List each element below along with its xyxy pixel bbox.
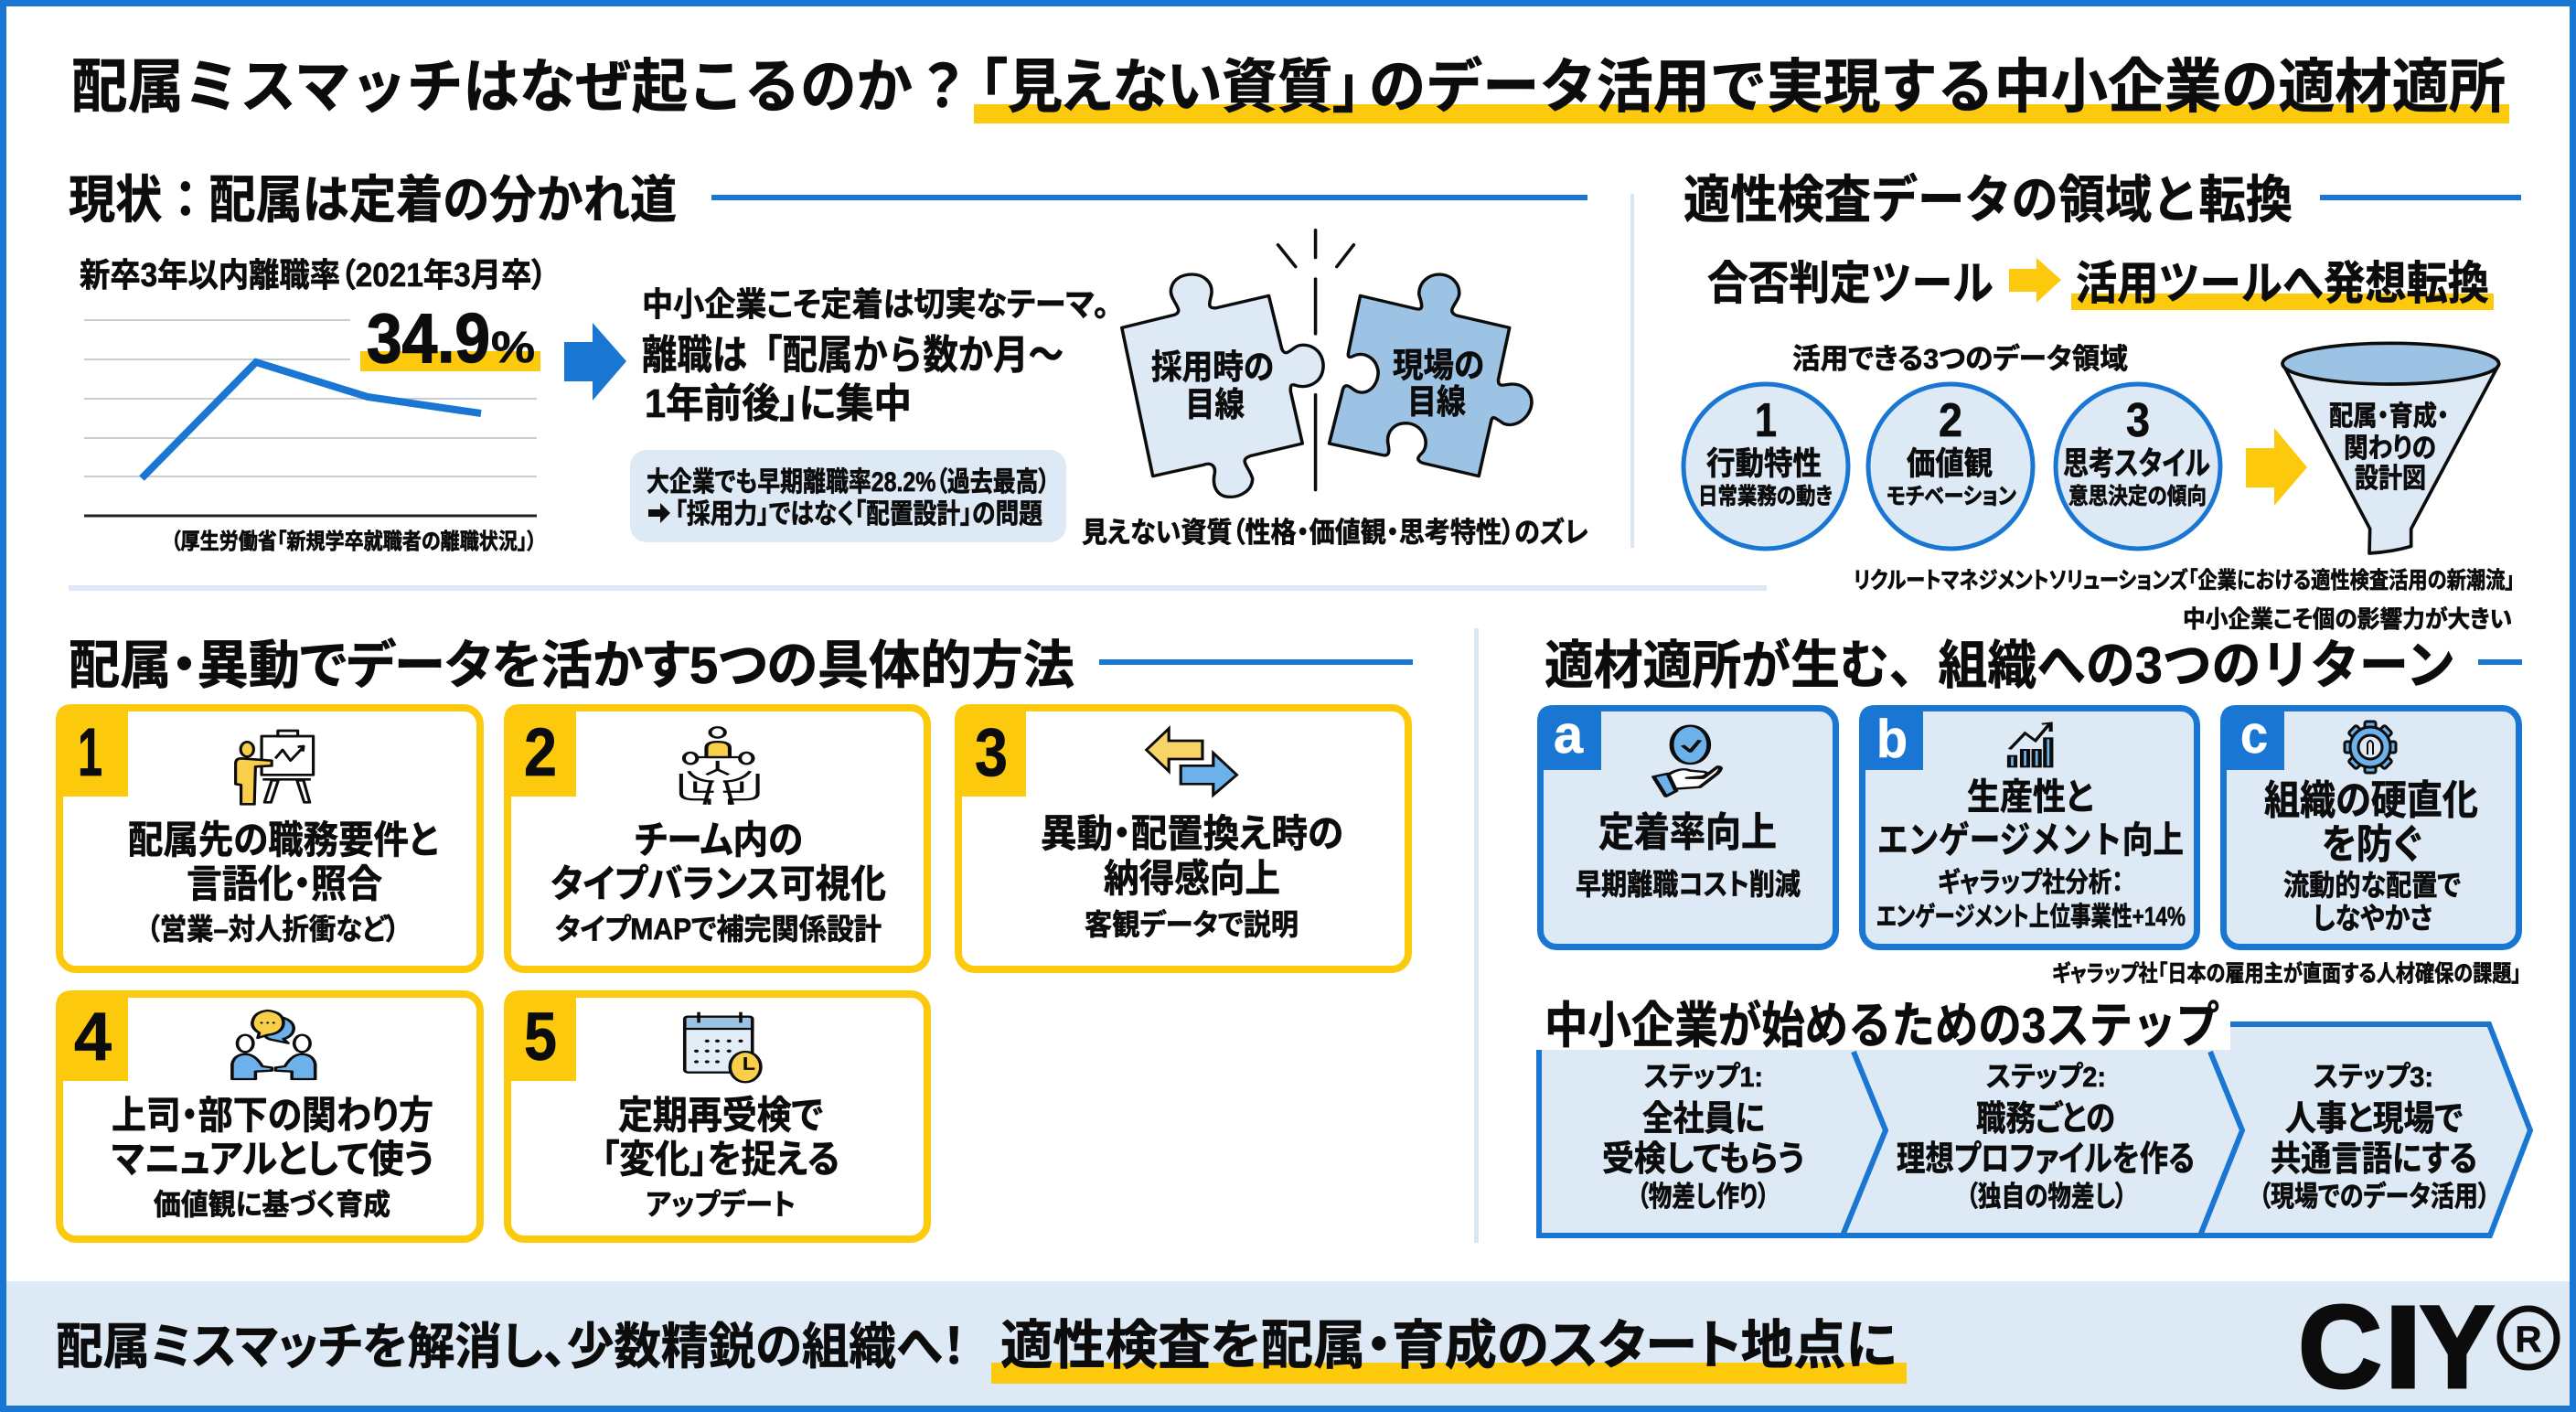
panel: three returns [1537,636,2522,987]
title [71,54,2509,123]
circle 2: 価値観 [1907,446,1993,482]
line chart [84,320,537,516]
chart title: 新卒3年以内離職率（2021年3月卒） [80,256,547,294]
heading: five methods: 配属・異動でデータを活かす5つの具体的方法 [69,636,1074,695]
step 2: 理想プロファイルを作る [1897,1140,2195,1179]
key message [642,285,1109,426]
card 4: マニュアルとして使う [112,1138,433,1181]
panel: three steps [1535,995,2530,1236]
note box [630,450,1066,542]
icon: hand with check [1653,726,1721,797]
card a: 早期離職コスト削減 [1576,868,1801,901]
chevron flow [1535,995,2530,1236]
card b [1859,705,2197,947]
card 4: 上司・部下の関わり方 [112,1094,433,1137]
card 1: 1 [78,714,102,790]
title: 配属ミスマッチはなぜ起こるのか [71,54,913,120]
card 3: 異動・配置換え時の [1041,812,1343,855]
circle 3: 思考スタイル [2063,446,2210,482]
card 3: 3 [975,714,1008,790]
card 2: タイプバランス可視化 [550,862,886,905]
puzzle caption: 見えない資質（性格・価値観・思考特性）のズレ [1082,517,1588,549]
circle 1: 行動特性 [1706,446,1822,482]
card 5: アップデート [646,1188,796,1221]
key message: 1年前後」に集中 [645,381,912,426]
card 2: 2 [524,714,557,790]
mindset shift: 活用ツールへ発想転換 [2076,258,2489,309]
card 1: 言語化・照合 [187,862,382,905]
logo: CIY: C [2298,1282,2382,1412]
logo: CIY: R [2516,1320,2542,1360]
card b: エンゲージメント上位事業性+14% [1876,902,2186,932]
circle 2: 2 [1939,394,1962,447]
illustration: puzzle pieces: 目線 [1407,383,1466,421]
step 1: （物差し作り） [1637,1181,1769,1213]
card 4: 4 [74,999,112,1075]
note box: 大企業でも早期離職率28.2%（過去最高） [647,467,1050,497]
step 2: ステップ2: [1986,1061,2106,1093]
card 4: 価値観に基づく育成 [154,1188,390,1221]
heading: three returns: 適材適所が生む、組織への3つのリターン [1545,636,2455,695]
note box: 「採用力」ではなく「配置設計」の問題 [675,499,1042,530]
icon: growth chart [2009,723,2051,766]
step 3: （現場でのデータ活用） [2259,1181,2490,1213]
icon: calendar and clock [685,1012,761,1082]
card b: b [1876,710,1908,769]
logo: CIY: Y [2420,1282,2495,1412]
icon: two people talking [232,1011,315,1079]
arrow: chart to message [564,323,626,401]
card b: エンゲージメント向上 [1877,820,2184,861]
mindset shift [1707,258,2494,310]
footer highlight bar [991,1363,1907,1384]
card 5: 5 [524,999,557,1075]
chart source: （厚生労働省「新規学卒就職者の離職状況」） [171,530,537,554]
step 3: 共通言語にする [2271,1140,2477,1179]
card a: 定着率向上 [1598,810,1777,855]
step 2: （独自の物差し） [1966,1181,2127,1213]
icon: presenter [236,731,314,804]
circle 1 [1683,384,1848,549]
key message: 離職は「配属から数か月〜 [642,333,1064,378]
card 5 [504,990,927,1239]
title: のデータ活用で実現する中小企業の適材適所 [1369,54,2506,120]
sub heading: 3 domains: 活用できる3つのデータ領域 [1792,343,2128,375]
icon: gear [2345,722,2396,773]
card 1: 配属先の職務要件と [128,818,438,861]
step 1 [1602,1061,1804,1213]
circle 3 [2056,384,2220,549]
circle 3: 3 [2126,394,2150,447]
heading: three steps: 中小企業が始めるための3ステップ [1545,999,2219,1054]
step 3 [2259,1061,2490,1213]
heading: current situation: 現状：配属は定着の分かれ道 [69,171,677,229]
card 5: 「変化」を捉える [602,1138,839,1181]
icon: funnel [2282,343,2499,553]
card c: を防ぐ [2322,822,2421,867]
card 1 [56,704,480,969]
card 5: 定期再受検で [618,1094,823,1137]
card c: 組織の硬直化 [2264,778,2478,823]
step 3: 人事と現場で [2285,1100,2463,1139]
card 2: タイプMAPで補完関係設計 [555,913,882,946]
card 3: 客観データで説明 [1085,908,1299,941]
card b: 生産性と [1967,777,2093,818]
step 2: 職務ごとの [1976,1100,2115,1139]
footer call to action: 適性検査を配属・育成のスタート地点に [1000,1316,1897,1375]
card 2: チーム内の [635,818,803,861]
footer band [0,1281,2576,1412]
panel: five methods [56,636,1413,1239]
heading: aptitude data: 適性検査データの領域と転換 [1683,171,2293,229]
icon: funnel: 関わりの [2344,433,2436,464]
circle 2: モチベーション [1887,484,2016,509]
illustration: puzzle pieces: 目線 [1185,386,1245,423]
card 3: 納得感向上 [1104,857,1280,900]
card a [1537,705,1836,947]
callout: 34.9%: 34.9 [367,300,490,378]
circle 3: 意思決定の傾向 [2068,484,2207,509]
circle 1: 日常業務の動き [1698,484,1833,509]
card c: c [2240,705,2268,765]
card 3 [955,704,1408,969]
icon: exchange arrows [1147,729,1236,795]
card 2 [504,704,927,969]
key message: 中小企業こそ定着は切実なテーマ。 [642,285,1109,323]
card a: a [1554,705,1584,765]
card b: ギャラップ社分析： [1938,868,2123,898]
step 2 [1897,1061,2195,1213]
icon: funnel: 設計図 [2355,464,2426,494]
card c: 流動的な配置で [2283,869,2461,902]
circle 1: 1 [1755,394,1777,447]
panel: aptitude data domains [1683,171,2521,633]
step 1: 受検してもらう [1602,1140,1804,1179]
footer lead text: 配属ミスマッチを解消し、少数精鋭の組織へ！ [56,1320,966,1375]
title: ？ [915,54,970,120]
puzzle left label: 採用時の [1151,348,1274,386]
circle 2 [1868,384,2033,549]
card c: しなやかさ [2313,902,2432,935]
card 4 [56,990,480,1239]
icon: team meeting [681,727,758,805]
mindset shift: 合否判定ツール [1707,258,1993,309]
icon: funnel: 配属・育成・ [2329,401,2449,432]
illustration: puzzle pieces [1122,230,1532,497]
step 3: ステップ3: [2314,1061,2433,1093]
title: 「見えない資質」 [979,54,1361,120]
small company note: 中小企業こそ個の影響力が大きい [2183,605,2512,633]
arrow: to funnel [2246,428,2307,506]
logo: CIY: I [2384,1282,2422,1412]
logo: CIY [2298,1282,2557,1412]
callout: 34.9%: % [491,324,535,372]
step 1: 全社員に [1642,1100,1765,1139]
step 1: ステップ1: [1644,1061,1763,1093]
card c [2220,705,2518,947]
puzzle right label: 現場の [1393,347,1484,384]
card 1: （営業–対人折衝など） [146,913,400,946]
panel: current situation [69,171,1588,554]
